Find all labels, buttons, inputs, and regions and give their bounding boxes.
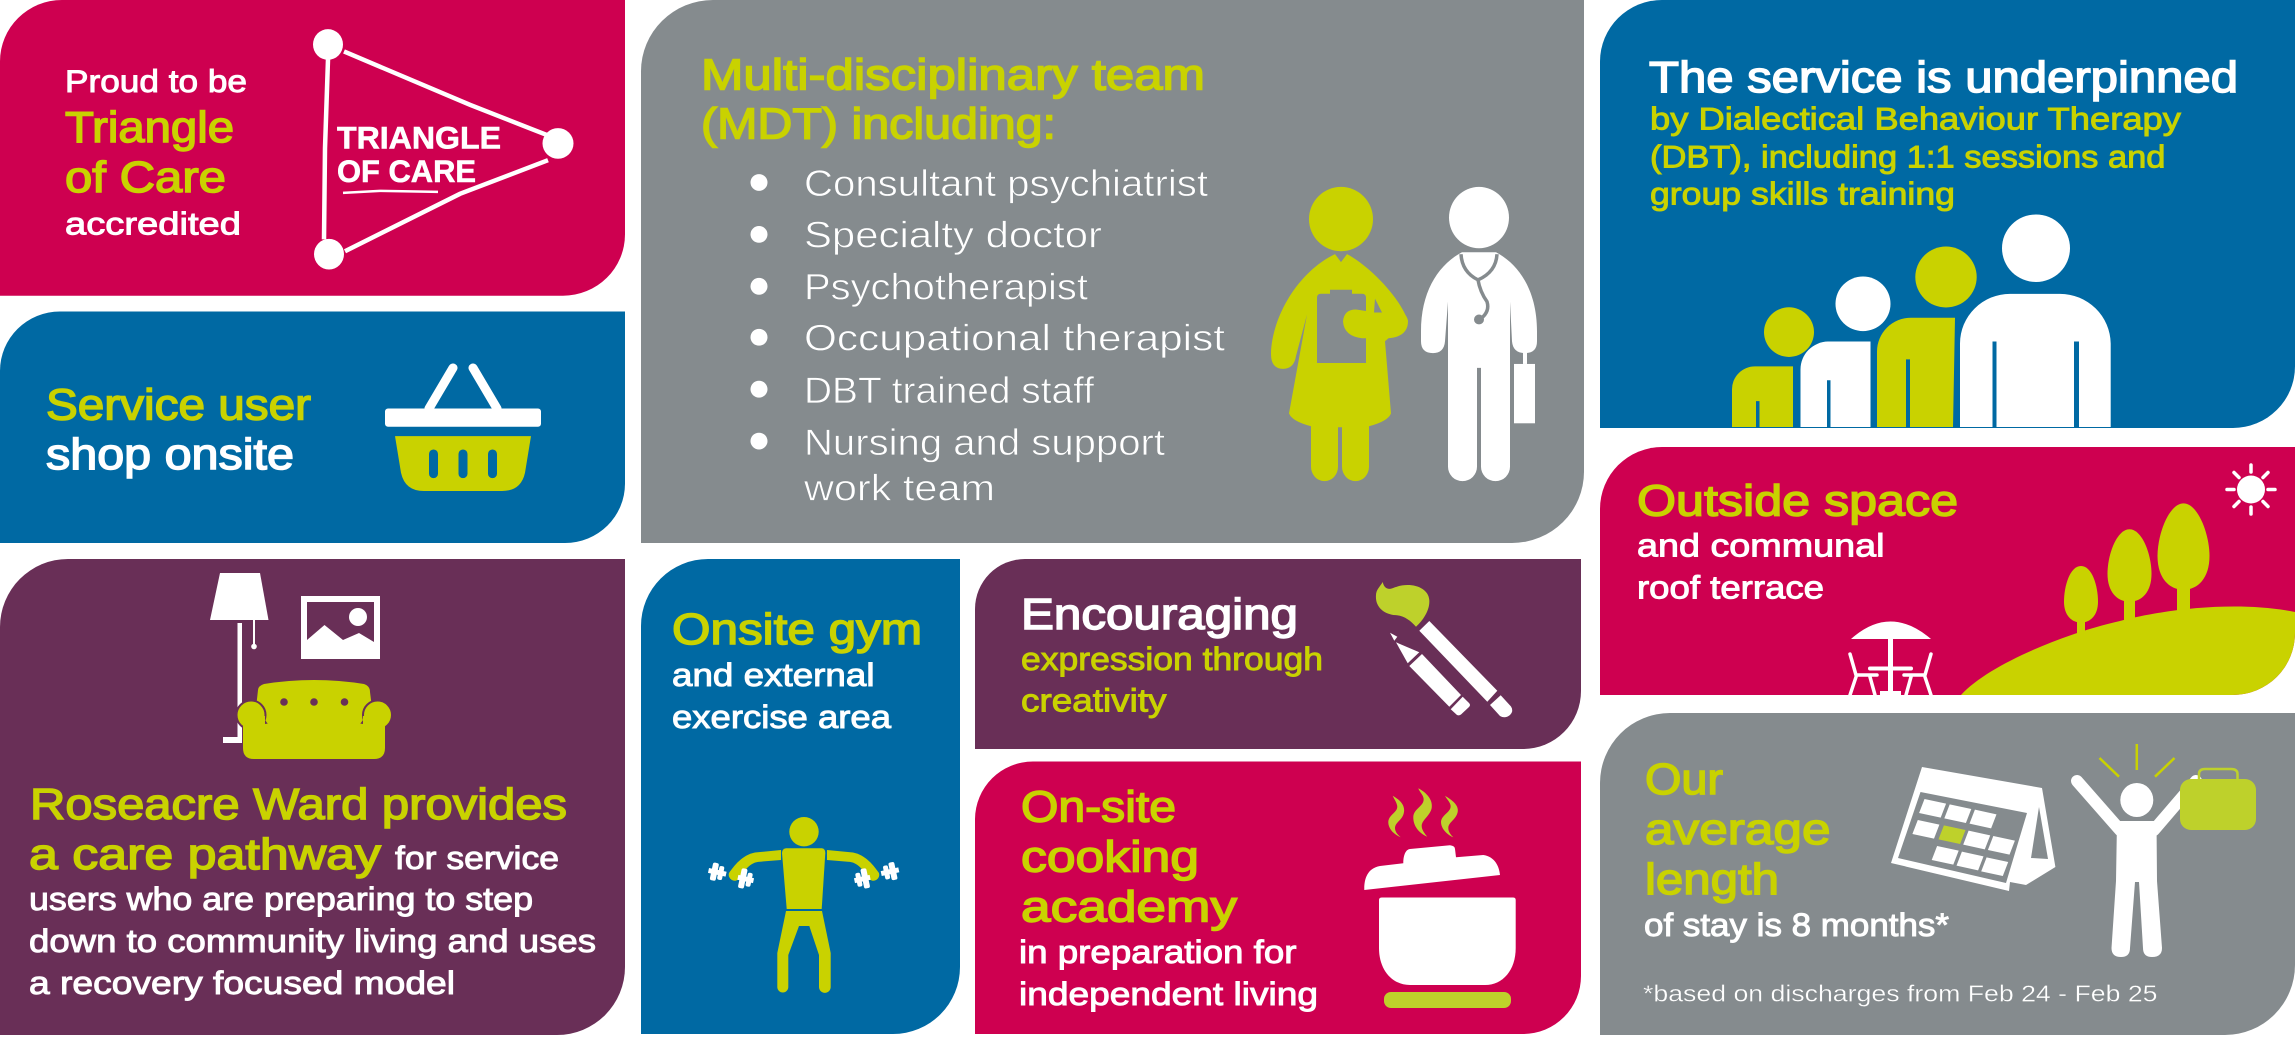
text: Roseacre Ward care pathway description: users who are preparing to step xyxy=(29,881,533,917)
icon: framed picture xyxy=(301,596,380,659)
text: service underpinned by DBT: by Dialectical Behaviour Therapy xyxy=(1650,101,2181,137)
text: Proud to be Triangle of Care accredited: Proud to be xyxy=(65,63,247,99)
text: Onsite gym and external exercise area: and external xyxy=(672,657,874,693)
icon: paintbrush and pencil xyxy=(1376,582,1512,717)
icon: group of four people xyxy=(1732,214,2111,427)
panel: Triangle of Care accreditation xyxy=(0,0,625,296)
text: service underpinned by DBT: The service is underpinned xyxy=(1649,53,2238,102)
panel: Roseacre Ward care pathway xyxy=(0,559,625,1035)
text: Encouraging expression through creativity xyxy=(1021,590,1323,718)
list: team roles: DBT trained staff xyxy=(804,370,1095,411)
text: Roseacre Ward care pathway description: a care pathway xyxy=(29,830,381,879)
text: Outside space and communal roof terrace: Outside space xyxy=(1637,476,1958,526)
text: On-site cooking academy in preparation for independent living: academy xyxy=(1021,882,1237,932)
text: Proud to be Triangle of Care accredited: Triangle xyxy=(65,103,234,152)
icon: steaming cooking pot xyxy=(1364,788,1516,1008)
text: Onsite gym and external exercise area: exercise area xyxy=(672,699,891,735)
icon: sun xyxy=(2227,465,2275,514)
text: Outside space and communal roof terrace: and communal xyxy=(1637,528,1884,564)
text: Service user shop onsite: Service user xyxy=(46,381,311,429)
text: Roseacre Ward care pathway description: for service xyxy=(395,840,559,876)
list: team roles: Nursing and support xyxy=(804,422,1165,463)
text: Proud to be Triangle of Care accredited: accredited xyxy=(65,206,241,241)
panel: outside space xyxy=(1600,447,2295,695)
icon: desk calendar xyxy=(1891,767,2055,891)
text: Onsite gym and external exercise area: Onsite gym xyxy=(672,605,922,654)
icon: Triangle of Care logo xyxy=(313,29,574,270)
text: Encouraging expression through creativity: Encouraging xyxy=(1021,590,1298,639)
text: On-site cooking academy in preparation for independent living: cooking xyxy=(1021,832,1199,882)
icon: patio table and parasol xyxy=(1850,622,1931,695)
list: team roles: Specialty doctor xyxy=(804,215,1102,256)
text: average length of stay: Our xyxy=(1645,755,1723,804)
text: On-site cooking academy in preparation for independent living: On-site xyxy=(1021,782,1176,832)
panel: average length of stay xyxy=(1600,713,2295,1035)
icon: trees on a hill xyxy=(1961,503,2295,695)
list: team roles xyxy=(750,163,1225,508)
text: Encouraging expression through creativity: expression through xyxy=(1021,641,1323,677)
text: Encouraging expression through creativity: creativity xyxy=(1021,682,1166,718)
panel: on-site cooking academy xyxy=(975,762,1581,1034)
icon: nurse with clipboard xyxy=(1271,187,1408,481)
panel: service user shop xyxy=(0,312,625,543)
list: team roles: work team xyxy=(803,468,995,508)
text: service underpinned by DBT xyxy=(1649,53,2238,212)
text: Outside space and communal roof terrace: roof terrace xyxy=(1637,570,1824,606)
text: Roseacre Ward care pathway description: a recovery focused model xyxy=(29,965,455,1001)
text: Service user shop onsite xyxy=(46,381,311,479)
text: On-site cooking academy in preparation for independent living: independent living xyxy=(1019,976,1318,1012)
icon: floor lamp xyxy=(210,573,268,743)
heading: Multi-disciplinary team: Multi-disciplinary team xyxy=(701,51,1205,99)
text: Proud to be Triangle of Care accredited xyxy=(65,63,247,241)
icon: sofa xyxy=(236,680,392,759)
text: Outside space and communal roof terrace xyxy=(1637,476,1958,606)
text: average length of stay: average xyxy=(1645,805,1830,854)
panel: DBT underpinned service xyxy=(1600,0,2295,428)
text: Roseacre Ward care pathway description xyxy=(29,780,596,1001)
text: Roseacre Ward care pathway description: Roseacre Ward provides xyxy=(30,780,567,829)
icon: happy person with suitcase xyxy=(2077,744,2256,957)
panel: encouraging creativity xyxy=(975,559,1581,749)
panel: onsite gym xyxy=(641,559,960,1034)
text: average length of stay xyxy=(1644,755,1949,943)
text: service underpinned by DBT: group skills training xyxy=(1650,176,1955,212)
text: Onsite gym and external exercise area xyxy=(672,605,922,735)
text: On-site cooking academy in preparation for independent living xyxy=(1019,782,1318,1012)
text: Proud to be Triangle of Care accredited: of Care xyxy=(65,153,226,202)
text: Service user shop onsite: shop onsite xyxy=(46,430,294,479)
icon: doctor with stethoscope xyxy=(1421,187,1537,481)
text: On-site cooking academy in preparation for independent living: in preparation for xyxy=(1019,934,1297,970)
panel: multi-disciplinary team xyxy=(641,0,1584,543)
icon: Triangle of Care logo: TRIANGLE xyxy=(337,120,501,155)
list: team roles: Psychotherapist xyxy=(804,267,1088,308)
text: Roseacre Ward care pathway description: down to community living and uses xyxy=(29,923,596,959)
heading: Multi-disciplinary team: (MDT) including: xyxy=(701,100,1056,148)
icon: Triangle of Care logo: OF CARE xyxy=(337,153,476,189)
footnote: discharge dates: *based on discharges from Feb 24 - Feb 25 xyxy=(1643,980,2158,1006)
text: average length of stay: of stay is 8 months* xyxy=(1644,907,1949,943)
text: service underpinned by DBT: (DBT), including 1:1 sessions and xyxy=(1650,138,2165,174)
heading: Multi-disciplinary team xyxy=(701,51,1205,148)
list: team roles: Consultant psychiatrist xyxy=(804,163,1208,204)
icon: shopping basket xyxy=(385,368,541,491)
icon: person lifting dumbbells xyxy=(707,817,901,993)
text: average length of stay: length xyxy=(1645,855,1779,904)
list: team roles: Occupational therapist xyxy=(804,318,1225,359)
